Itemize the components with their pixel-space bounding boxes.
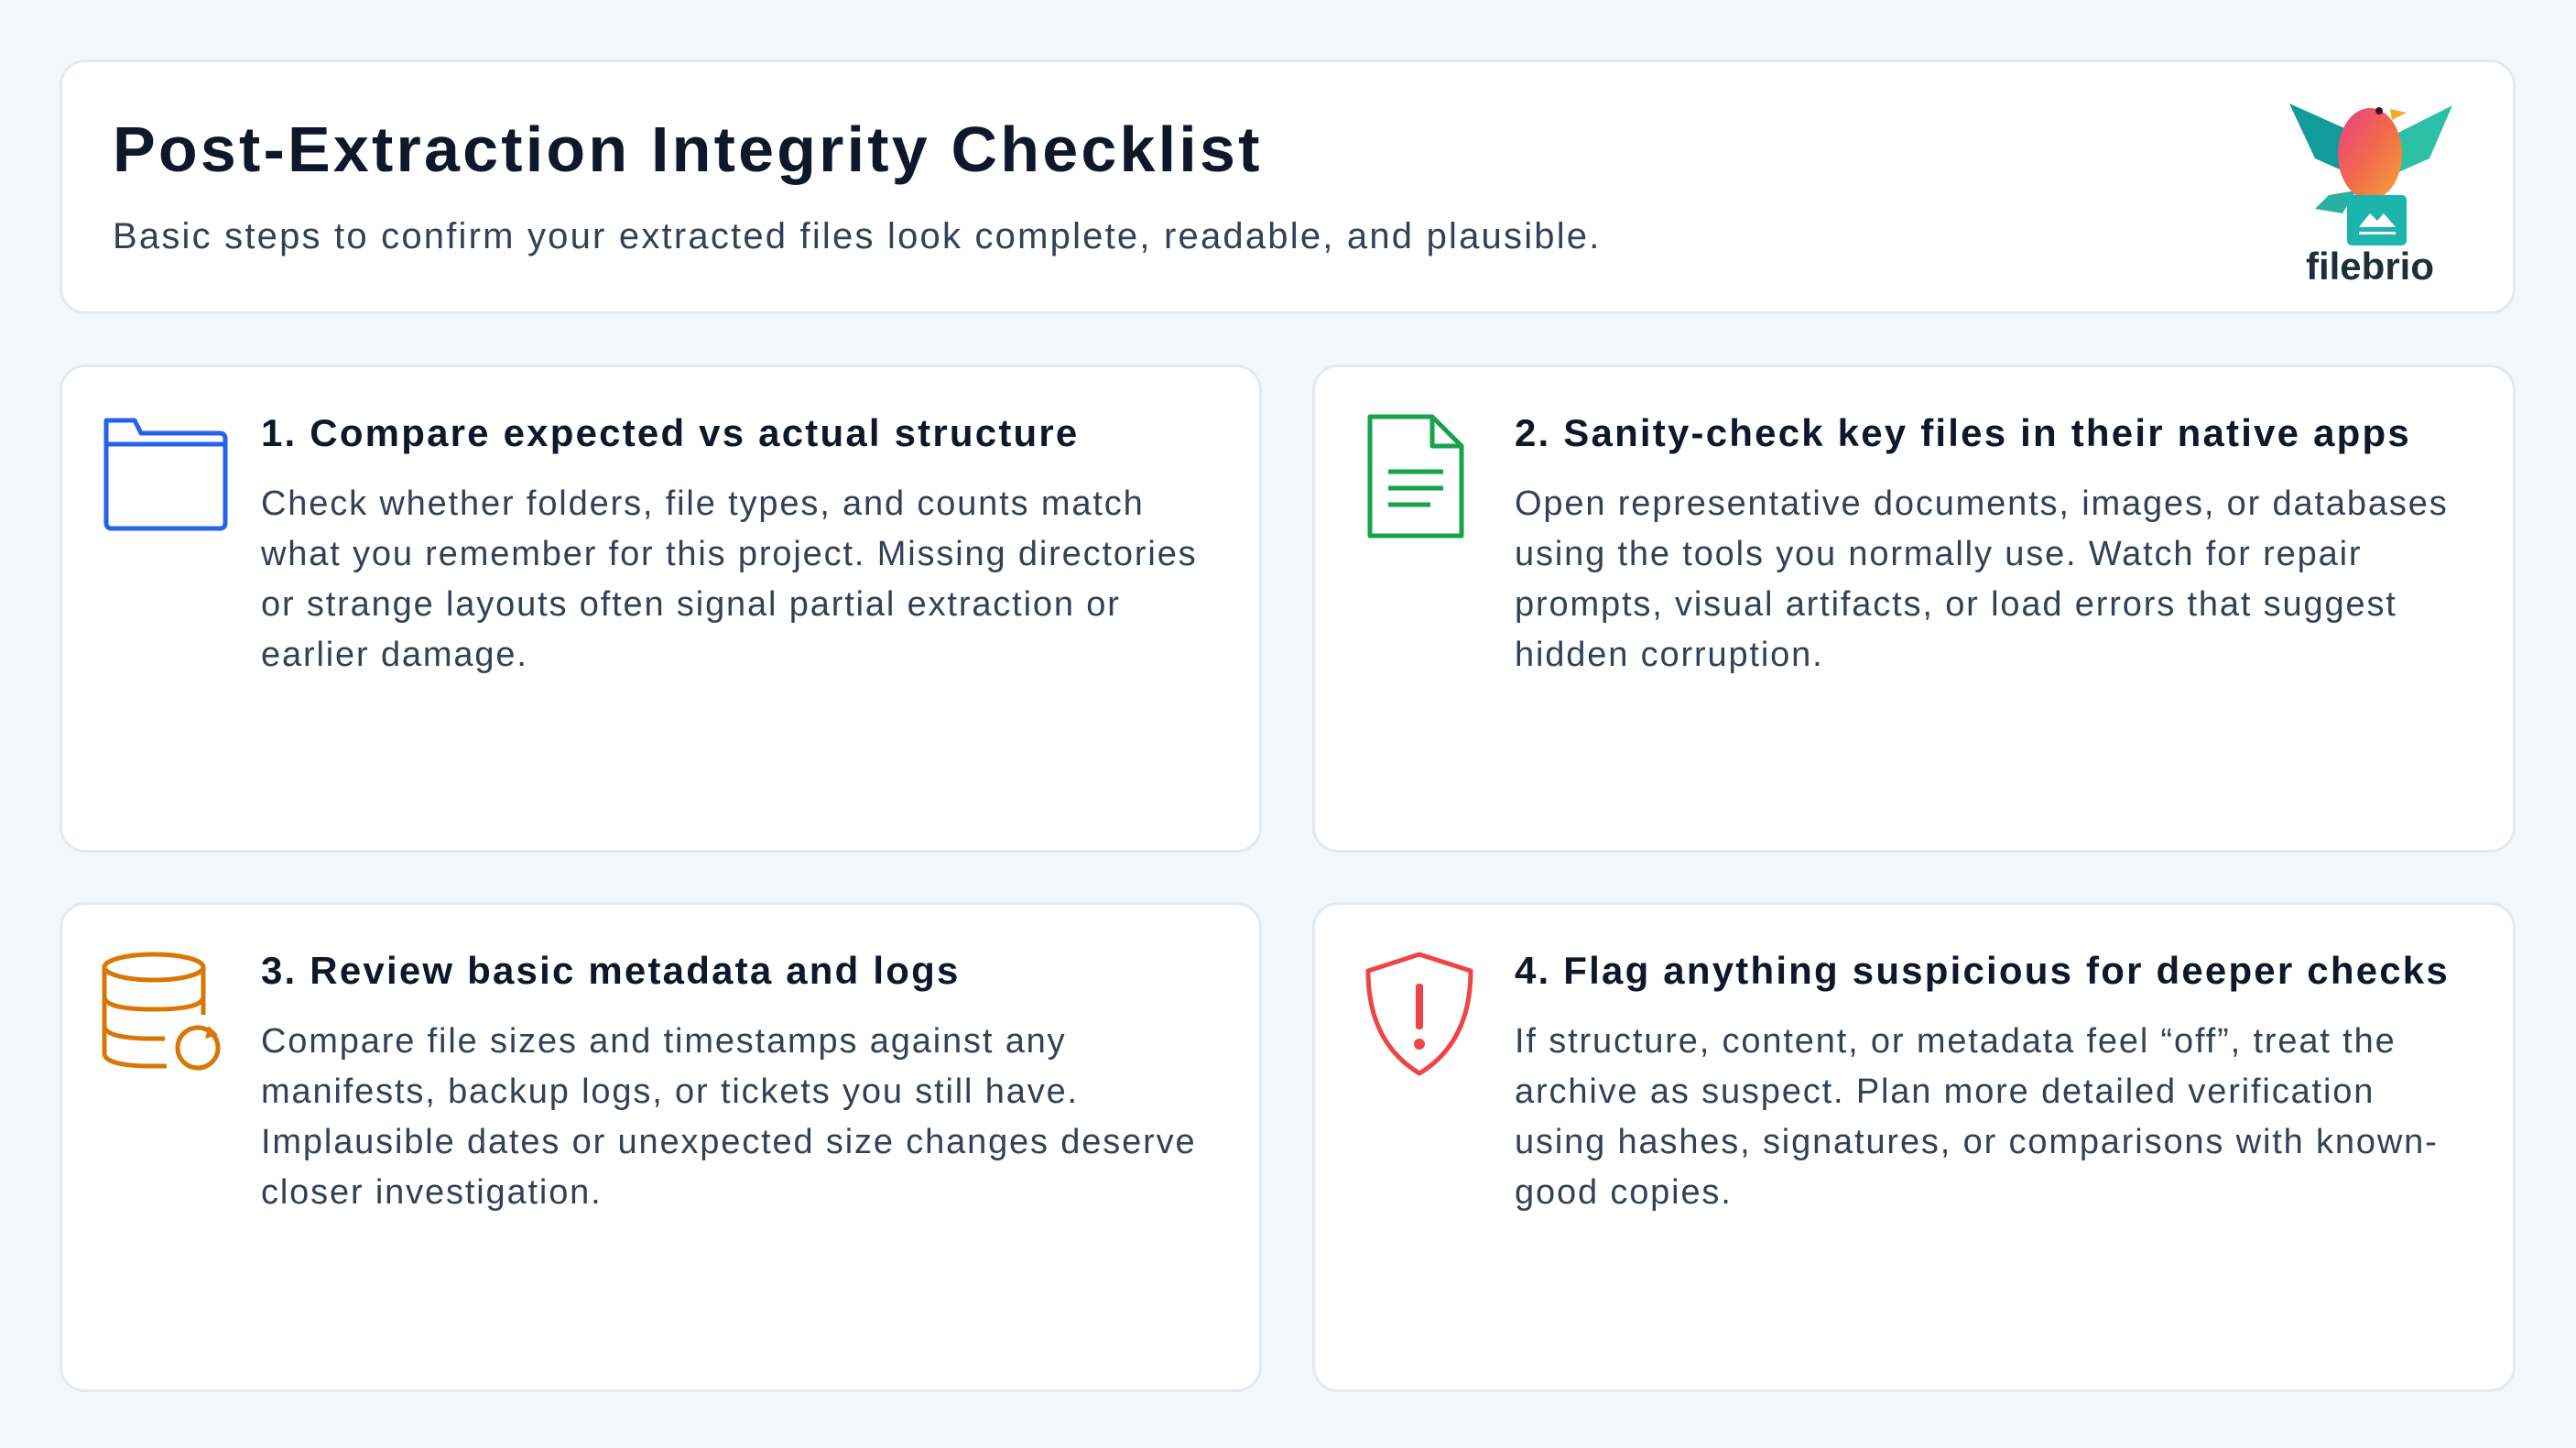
- body 3: Implausible dates or unexpected size changes deserve: [261, 1123, 1196, 1161]
- body 3: closer investigation.: [261, 1173, 603, 1212]
- body 3: manifests, backup logs, or tickets you still have.: [261, 1072, 1079, 1111]
- icon: shield warning: [1366, 953, 1473, 1075]
- heading 1: 1. Compare expected vs actual structure: [261, 411, 1079, 454]
- body 4: If structure, content, or metadata feel “off”, treat the: [1515, 1022, 2397, 1061]
- subtitle: Basic steps to confirm your extracted files look complete, readable, and plausible.: [113, 216, 1602, 256]
- body 4: good copies.: [1515, 1173, 1733, 1212]
- body 1: [261, 484, 1198, 674]
- icon: database refresh: [103, 953, 220, 1070]
- icon: folder: [104, 418, 227, 531]
- body 2: hidden corruption.: [1515, 636, 1824, 674]
- body 2: prompts, visual artifacts, or load errors that suggest: [1515, 585, 2397, 624]
- body 1: what you remember for this project. Missing directories: [261, 535, 1198, 573]
- body 4: [1515, 1022, 2439, 1212]
- icon: document: [1368, 414, 1463, 539]
- body 3: Compare file sizes and timestamps against any: [261, 1022, 1067, 1061]
- panel: step 2: [1312, 365, 2516, 853]
- body 1: earlier damage.: [261, 636, 528, 674]
- panel: step 4: [1312, 902, 2516, 1392]
- body 4: using hashes, signatures, or comparisons with known-: [1515, 1123, 2439, 1161]
- body 1: Check whether folders, file types, and counts match: [261, 484, 1145, 523]
- logo: filebrio: [2289, 103, 2452, 288]
- body 2: Open representative documents, images, or databases: [1515, 484, 2449, 523]
- heading 4: 4. Flag anything suspicious for deeper checks: [1515, 949, 2450, 992]
- body 2: using the tools you normally use. Watch for repair: [1515, 535, 2362, 573]
- title: Post-Extraction Integrity Checklist: [113, 114, 1263, 185]
- panel: step 3: [60, 902, 1262, 1392]
- heading 3: 3. Review basic metadata and logs: [261, 949, 961, 992]
- body 2: [1515, 484, 2449, 674]
- body 4: archive as suspect. Plan more detailed verification: [1515, 1072, 2375, 1111]
- body 3: [261, 1022, 1196, 1212]
- header panel: [60, 60, 2516, 314]
- logo: filebrio: filebrio: [2306, 245, 2434, 288]
- body 1: or strange layouts often signal partial extraction or: [261, 585, 1121, 624]
- panel: step 1: [60, 365, 1262, 853]
- heading 2: 2. Sanity-check key files in their native apps: [1515, 411, 2411, 454]
